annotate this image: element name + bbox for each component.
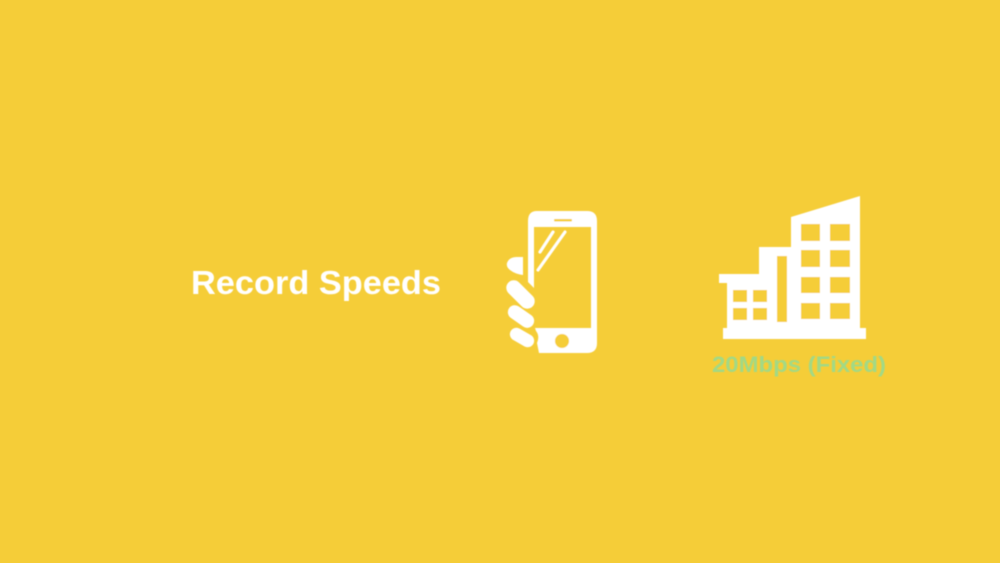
- icon: hand holding smartphone: [503, 211, 597, 353]
- tower windows: [733, 224, 850, 322]
- label: 20Mbps (Fixed): 20Mbps (Fixed): [712, 352, 886, 377]
- heading: Record Speeds: Record Speeds: [191, 264, 441, 301]
- icon: office buildings: [719, 196, 866, 339]
